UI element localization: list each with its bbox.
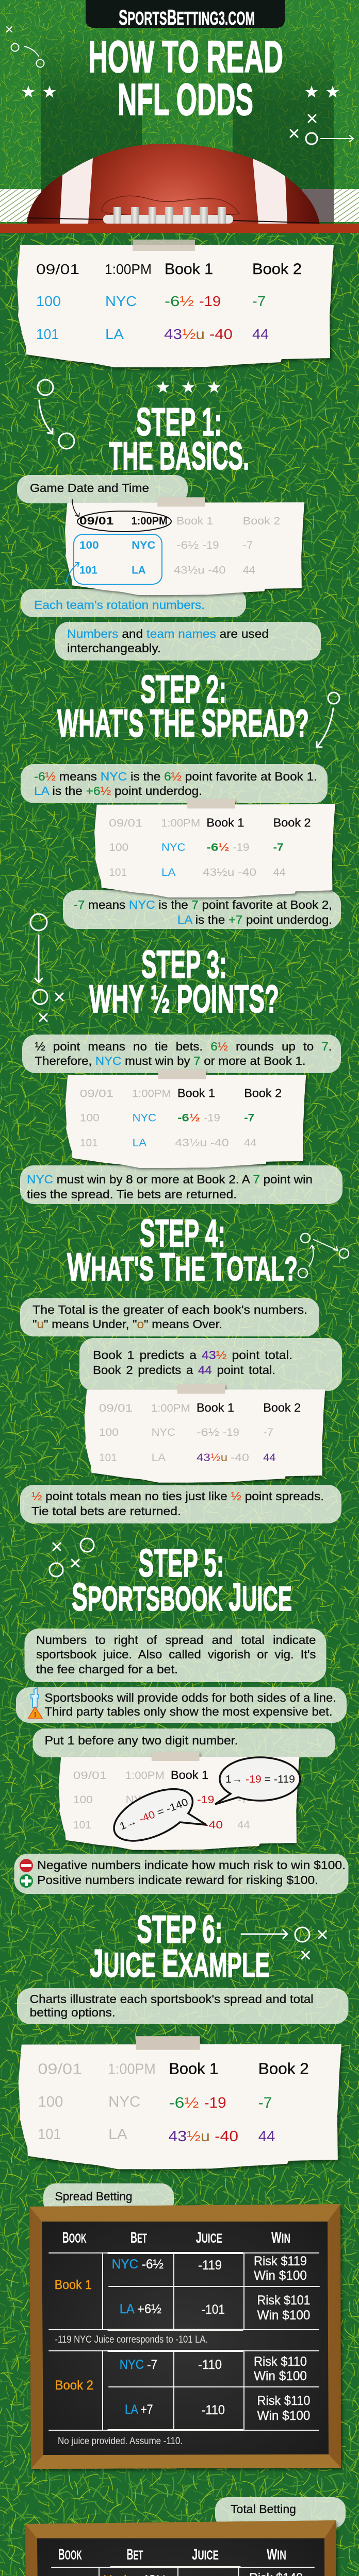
- tape: [152, 1752, 200, 1761]
- heading: step 4: [67, 1212, 298, 1289]
- odds ticket: step 3: -6½: [177, 1111, 200, 1124]
- stars: [157, 381, 220, 393]
- tape: [136, 2036, 200, 2050]
- odds ticket: step 6: Book 1: [169, 2060, 218, 2078]
- heading: step 5: SPORTSBOOK JUICE: [72, 1575, 292, 1619]
- callout: rotation numbers: [21, 589, 246, 617]
- odds ticket: step 3: 101: [80, 1137, 98, 1149]
- heading: step 1: [109, 400, 249, 478]
- odds ticket: step 1: 43½u: [174, 564, 205, 576]
- callout: book 2 spread: -7 means NYC is the 7 point favorite at Book 2,: [74, 898, 332, 911]
- callout: half point: [22, 1035, 341, 1073]
- table headers: [62, 2229, 290, 2246]
- title: [88, 32, 283, 125]
- odds ticket: step 5: NYC: [126, 1793, 150, 1806]
- odds ticket: step 1: LA: [132, 564, 145, 576]
- heading: step 2: STEP 2:: [140, 668, 226, 711]
- odds ticket: step 4: 100: [99, 1426, 119, 1438]
- callout: book predictions: Book 2 predicts a 44 point total.: [93, 1363, 275, 1377]
- odds ticket: step 2: 100: [109, 841, 128, 853]
- tape: [158, 1070, 206, 1079]
- panel: step 1: [17, 380, 321, 660]
- odds ticket: step 1: 101: [79, 564, 97, 576]
- odds ticket: step 2: 1:00PM: [161, 817, 200, 829]
- callout: negative and positive: [14, 1854, 349, 1894]
- icon: plus: [20, 1874, 33, 1888]
- table headers: BET: [130, 2229, 147, 2246]
- odds ticket: step 4: -40: [231, 1451, 249, 1464]
- label: total betting: [215, 2497, 346, 2528]
- callout: put 1 before: Put 1 before any two digit number.: [44, 1734, 238, 1747]
- odds ticket: step 2: 44: [273, 866, 286, 878]
- header bar: [86, 0, 285, 29]
- odds ticket: step 3: NYC: [133, 1111, 156, 1124]
- callout: juice definition: Numbers to right of spread and total indicate: [36, 1633, 316, 1647]
- book 2 rows: LA +7: [125, 2402, 153, 2417]
- icon: warning triangle: [28, 1707, 42, 1719]
- heading: step 6: STEP 6:: [137, 1908, 222, 1952]
- odds ticket: main: -40: [209, 326, 233, 342]
- callout: half point: ½ point means no tie bets. 6½ rounds up to 7.: [35, 1040, 332, 1053]
- playbook marks: [50, 1538, 94, 1577]
- odds ticket: step 2: -19: [233, 841, 249, 853]
- odds ticket: step 1: Book 1: [176, 515, 213, 527]
- note: juice correspondence: -119 NYC Juice corresponds to -101 LA.: [55, 2334, 208, 2345]
- odds ticket: step 3: [66, 1070, 306, 1168]
- book 2 rows: Win $100: [257, 2409, 311, 2423]
- odds ticket: step 6: -7: [258, 2095, 272, 2111]
- callout: half totals: Tie total bets are returned.: [31, 1504, 181, 1518]
- table headers: [58, 2546, 286, 2563]
- odds ticket: step 6: 100: [38, 2094, 63, 2110]
- odds ticket: step 3: -19: [204, 1111, 220, 1124]
- odds ticket: main: -6½: [165, 293, 194, 309]
- yard line left: [0, 189, 41, 222]
- odds ticket: step 4: 44: [263, 1451, 276, 1464]
- callout: half totals: ½ point totals mean no ties just like ½ point spreads.: [31, 1489, 324, 1503]
- table headers: WIN: [267, 2546, 286, 2563]
- odds ticket: step 1: -7: [243, 539, 253, 551]
- callout: both sides of a line: Third party tables only show the most expensive bet.: [44, 1705, 332, 1718]
- book 1 rows: Book 1: [55, 2278, 92, 2292]
- icon: pointing finger: [31, 1688, 39, 1707]
- tape: [157, 497, 205, 506]
- book 2 rows: Win $100: [254, 2369, 307, 2383]
- title: NFL ODDS: [118, 75, 253, 125]
- callout: the total: "u" means Under, " o" means Over.: [32, 1317, 222, 1331]
- odds ticket: main: -7: [252, 293, 266, 309]
- odds ticket: step 5: -7: [237, 1793, 248, 1806]
- book 1 rows: -119: [198, 2258, 222, 2273]
- odds ticket: step 2: LA: [161, 866, 176, 878]
- chalk grid: [49, 2253, 319, 2430]
- odds ticket: main: 1:00PM: [105, 261, 152, 277]
- odds ticket: step 6: -19: [204, 2095, 226, 2111]
- odds ticket: step 4: [85, 1384, 325, 1483]
- book 1 rows: NYC -6½: [112, 2257, 164, 2272]
- heading: step 4: STEP 4:: [140, 1212, 225, 1256]
- callout: interchangeable: [55, 622, 321, 660]
- odds ticket: main: 101: [36, 326, 59, 342]
- odds ticket: step 5: 1:00PM: [125, 1769, 165, 1782]
- book 2 rows: -110: [198, 2358, 222, 2372]
- panel: step 4: [20, 1212, 349, 1523]
- label: spread betting: [43, 2183, 174, 2214]
- odds ticket: main: 100: [36, 293, 61, 309]
- odds ticket: step 2: -7: [273, 841, 283, 853]
- callout: juice definition: [25, 1629, 326, 1682]
- book 2 rows: NYC -7: [120, 2358, 157, 2372]
- callout: game date and time: Game Date and Time: [30, 481, 149, 495]
- wood frame: [25, 2520, 337, 2576]
- odds ticket: step 1: [65, 497, 304, 595]
- odds ticket: step 6: -6½: [169, 2095, 199, 2111]
- odds ticket: step 6: 09/01: [38, 2061, 82, 2078]
- callout: the total: The Total is the greater of each book's numbers.: [32, 1303, 307, 1316]
- book 1 rows: Risk $119: [254, 2254, 307, 2268]
- odds ticket: step 6: Book 2: [258, 2060, 309, 2078]
- header bar: SPORTSBETTING3.COM: [119, 5, 255, 29]
- callout: tie spread: ties the spread. Tie bets are returned.: [27, 1188, 237, 1201]
- odds ticket: step 1: -6½: [176, 539, 199, 551]
- annotation: teams box: [66, 534, 162, 586]
- callout: book 1 spread: [21, 764, 328, 803]
- callout: interchangeable: interchangeably.: [67, 641, 161, 655]
- callout: negative and positive: Negative numbers indicate how much risk to win $100.: [37, 1858, 346, 1872]
- odds ticket: step 2: 101: [109, 866, 127, 878]
- callout: put 1 before: [33, 1728, 335, 1757]
- heading: step 5: [72, 1541, 292, 1619]
- book 2 rows: [55, 2354, 311, 2423]
- odds ticket: main: 09/01: [36, 261, 79, 277]
- table headers: JUICE: [196, 2229, 222, 2246]
- callout: tie spread: NYC must win by 8 or more at Book 2. A 7 point win: [27, 1173, 313, 1186]
- playbook marks left: [7, 27, 56, 98]
- callout: book 1 spread: LA is the +6½ point underdog.: [34, 784, 202, 798]
- heading: step 6: JUICE EXAMPLE: [90, 1942, 270, 1986]
- odds ticket: step 2: [94, 799, 335, 897]
- odds ticket: step 5: 100: [73, 1793, 93, 1806]
- book 1 rows: LA +6½: [120, 2302, 161, 2316]
- speech bubble: minus 40: 1→ -40 = -140: [118, 1797, 190, 1833]
- tape: [177, 1384, 225, 1394]
- callout: game date and time: [17, 475, 188, 503]
- callout: juice definition: sportsbook juice. Also called vigorish or vig. It's: [36, 1648, 316, 1661]
- odds ticket: step 6: 43½u: [168, 2128, 210, 2145]
- playbook arrow: [38, 380, 74, 449]
- field grass: [0, 0, 359, 224]
- odds ticket: step 1: 09/01: [79, 515, 114, 527]
- callout: charts: [17, 1988, 349, 2024]
- heading: step 4: WHAT'S THE TOTAL?: [67, 1245, 298, 1289]
- odds ticket: step 2: 43½u: [203, 866, 234, 878]
- odds ticket: step 5: -40: [204, 1819, 223, 1831]
- odds ticket: step 5: [59, 1752, 299, 1850]
- odds ticket: step 6: 101: [38, 2126, 61, 2143]
- speech bubble: minus 19: [215, 1757, 300, 1804]
- heading: step 3: STEP 3:: [141, 943, 227, 987]
- odds ticket: step 6: -40: [215, 2128, 238, 2145]
- note: no juice: No juice provided. Assume -110.: [58, 2436, 183, 2447]
- callout: negative and positive: Positive numbers indicate reward for risking $100.: [37, 1873, 318, 1887]
- odds ticket: step 5: Book 1: [171, 1768, 208, 1782]
- callout: half point: Therefore, NYC must win by 7 or more at Book 1.: [35, 1054, 305, 1067]
- odds ticket: step 3: 09/01: [80, 1087, 113, 1099]
- odds ticket: main: [17, 240, 334, 367]
- callout: the total: [20, 1298, 319, 1336]
- odds ticket: step 3: LA: [133, 1137, 147, 1149]
- odds ticket: step 3: -40: [210, 1137, 229, 1149]
- wood frame: [29, 2204, 341, 2469]
- playbook marks: [298, 1233, 349, 1278]
- odds ticket: step 1: 100: [79, 539, 99, 551]
- heading: step 1: STEP 1:: [136, 400, 222, 444]
- book 1 rows: Risk $101: [257, 2293, 311, 2308]
- chalkboard: spread betting: [29, 2204, 341, 2469]
- table headers: BOOK: [58, 2546, 82, 2563]
- table headers: BET: [127, 2546, 143, 2563]
- callout: book 2 spread: [63, 890, 341, 929]
- tape: [187, 799, 235, 808]
- odds ticket: step 3: 43½u: [175, 1137, 207, 1149]
- laces: [103, 207, 233, 224]
- callout: both sides of a line: Sportsbooks will provide odds for both sides of a line.: [44, 1691, 336, 1704]
- book 1 rows: -101: [202, 2302, 225, 2317]
- odds ticket: step 3: 100: [80, 1111, 100, 1124]
- odds ticket: step 5: 101: [73, 1819, 91, 1831]
- panel: step 6: [17, 1908, 349, 2576]
- board: [42, 2222, 329, 2455]
- book 2 rows: Risk $110: [257, 2394, 311, 2408]
- odds ticket: step 2: 09/01: [109, 817, 143, 829]
- speech bubble: minus 19: 1→ -19 = -119: [225, 1774, 295, 1785]
- odds ticket: step 2: NYC: [161, 841, 185, 853]
- playbook marks: [30, 914, 63, 1021]
- odds ticket: step 3: Book 2: [244, 1086, 282, 1099]
- icon: minus: [20, 1859, 33, 1872]
- odds ticket: step 1: NYC: [132, 539, 155, 551]
- heading: step 2: [57, 668, 309, 745]
- panel: step 2: [21, 668, 341, 929]
- chalk grid: [52, 2567, 314, 2576]
- odds ticket: step 2: -40: [238, 866, 256, 878]
- odds ticket: step 1: 1:00PM: [131, 515, 168, 527]
- odds ticket: main: 44: [252, 326, 269, 342]
- odds ticket: main: NYC: [105, 293, 137, 309]
- table headers: JUICE: [192, 2546, 219, 2563]
- heading: step 1: THE BASICS.: [109, 434, 249, 478]
- odds ticket: step 5: -19: [197, 1793, 214, 1806]
- callout: half totals: [20, 1485, 341, 1523]
- odds ticket: step 6: LA: [108, 2126, 127, 2143]
- odds ticket: step 4: Book 2: [263, 1401, 301, 1414]
- odds ticket: main: Book 1: [165, 261, 213, 278]
- odds ticket: step 5: 44: [237, 1819, 250, 1831]
- callout: rotation numbers: Each team's rotation numbers.: [34, 598, 205, 612]
- odds ticket: step 6: 1:00PM: [108, 2061, 156, 2078]
- yard line right: [302, 189, 359, 222]
- book 2 rows: Book 2: [55, 2378, 93, 2393]
- book 1 rows: [55, 2254, 310, 2323]
- playbook marks: [241, 1927, 326, 1959]
- tape: [133, 240, 195, 251]
- odds ticket: step 4: Book 1: [197, 1401, 234, 1414]
- odds ticket: main: 43½u: [164, 326, 205, 342]
- callout: charts: betting options.: [30, 2006, 116, 2019]
- callout: book predictions: [79, 1338, 342, 1391]
- annotation: date time circle: [72, 499, 171, 532]
- odds ticket: step 4: 1:00PM: [151, 1402, 190, 1414]
- odds ticket: step 3: 44: [244, 1137, 257, 1149]
- odds ticket: step 5: 09/01: [73, 1769, 107, 1782]
- odds ticket: main: -19: [199, 293, 221, 309]
- book 2 rows: Risk $110: [254, 2354, 307, 2369]
- callout: interchangeable: Numbers and team names are used: [67, 627, 269, 640]
- panel: hero field and football: [0, 0, 359, 233]
- book 1 rows: Win $100: [254, 2268, 307, 2283]
- odds ticket: step 4: 09/01: [99, 1402, 133, 1414]
- chalkboard: total betting: [25, 2520, 337, 2576]
- odds ticket: step 1: -40: [208, 564, 225, 576]
- odds ticket: step 6: 44: [258, 2128, 275, 2145]
- heading: step 5: STEP 5:: [138, 1541, 224, 1585]
- callout: book predictions: Book 1 predicts a 43½ point total.: [93, 1348, 292, 1362]
- book 1 rows: [52, 2571, 307, 2576]
- playbook marks right: [290, 86, 353, 144]
- odds ticket: step 3: -7: [244, 1111, 254, 1124]
- callout: both sides of a line: [16, 1687, 347, 1723]
- callout: juice definition: the fee charged for a bet.: [36, 1663, 178, 1676]
- heading: step 3: [89, 943, 279, 1021]
- football: [27, 144, 320, 224]
- callout: book 1 spread: -6½ means NYC is the 6½ point favorite at Book 1.: [34, 770, 317, 783]
- odds ticket: step 4: -19: [223, 1426, 239, 1438]
- odds ticket: step 4: NYC: [152, 1426, 175, 1438]
- odds ticket: step 3: Book 1: [177, 1086, 215, 1099]
- odds ticket: step 6: [19, 2036, 341, 2169]
- odds ticket: step 4: 43½u: [197, 1451, 227, 1464]
- odds ticket: step 6: NYC: [108, 2094, 140, 2110]
- odds ticket: step 2: -6½: [206, 841, 230, 853]
- book 1 rows: Win $100: [257, 2308, 311, 2323]
- heading: step 6: [90, 1908, 270, 1986]
- odds ticket: step 3: 1:00PM: [132, 1087, 171, 1099]
- red band: [0, 224, 359, 233]
- playbook arrow: [317, 692, 339, 747]
- panel: step 5: [14, 1538, 349, 1894]
- callout: charts: Charts illustrate each sportsbook's spread and total: [30, 1992, 314, 2006]
- speech bubble: minus 40: [114, 1789, 206, 1841]
- odds ticket: main: Book 2: [252, 261, 302, 278]
- odds ticket: step 4: 101: [99, 1451, 117, 1464]
- callout: tie spread: [20, 1165, 342, 1204]
- odds ticket: step 4: -7: [263, 1426, 273, 1438]
- callout: book 2 spread: LA is the +7 point underdog.: [177, 913, 332, 926]
- odds ticket: step 4: LA: [152, 1451, 166, 1464]
- board: [37, 2538, 325, 2576]
- odds ticket: step 2: Book 1: [206, 816, 244, 829]
- table headers: BOOK: [62, 2229, 87, 2246]
- table headers: WIN: [271, 2229, 290, 2246]
- odds ticket: step 1: -19: [203, 539, 219, 551]
- odds ticket: step 4: -6½: [197, 1426, 219, 1438]
- odds ticket: step 1: 44: [243, 564, 255, 576]
- label: spread betting: Spread Betting: [55, 2190, 132, 2203]
- panel: step 3: [20, 914, 342, 1204]
- label: total betting: Total Betting: [231, 2502, 296, 2516]
- odds ticket: step 2: Book 2: [273, 816, 311, 829]
- book 2 rows: -110: [202, 2403, 225, 2417]
- icon: warning triangle: !: [34, 1710, 36, 1719]
- odds ticket: step 1: Book 2: [243, 515, 280, 527]
- odds ticket: main: LA: [105, 326, 124, 342]
